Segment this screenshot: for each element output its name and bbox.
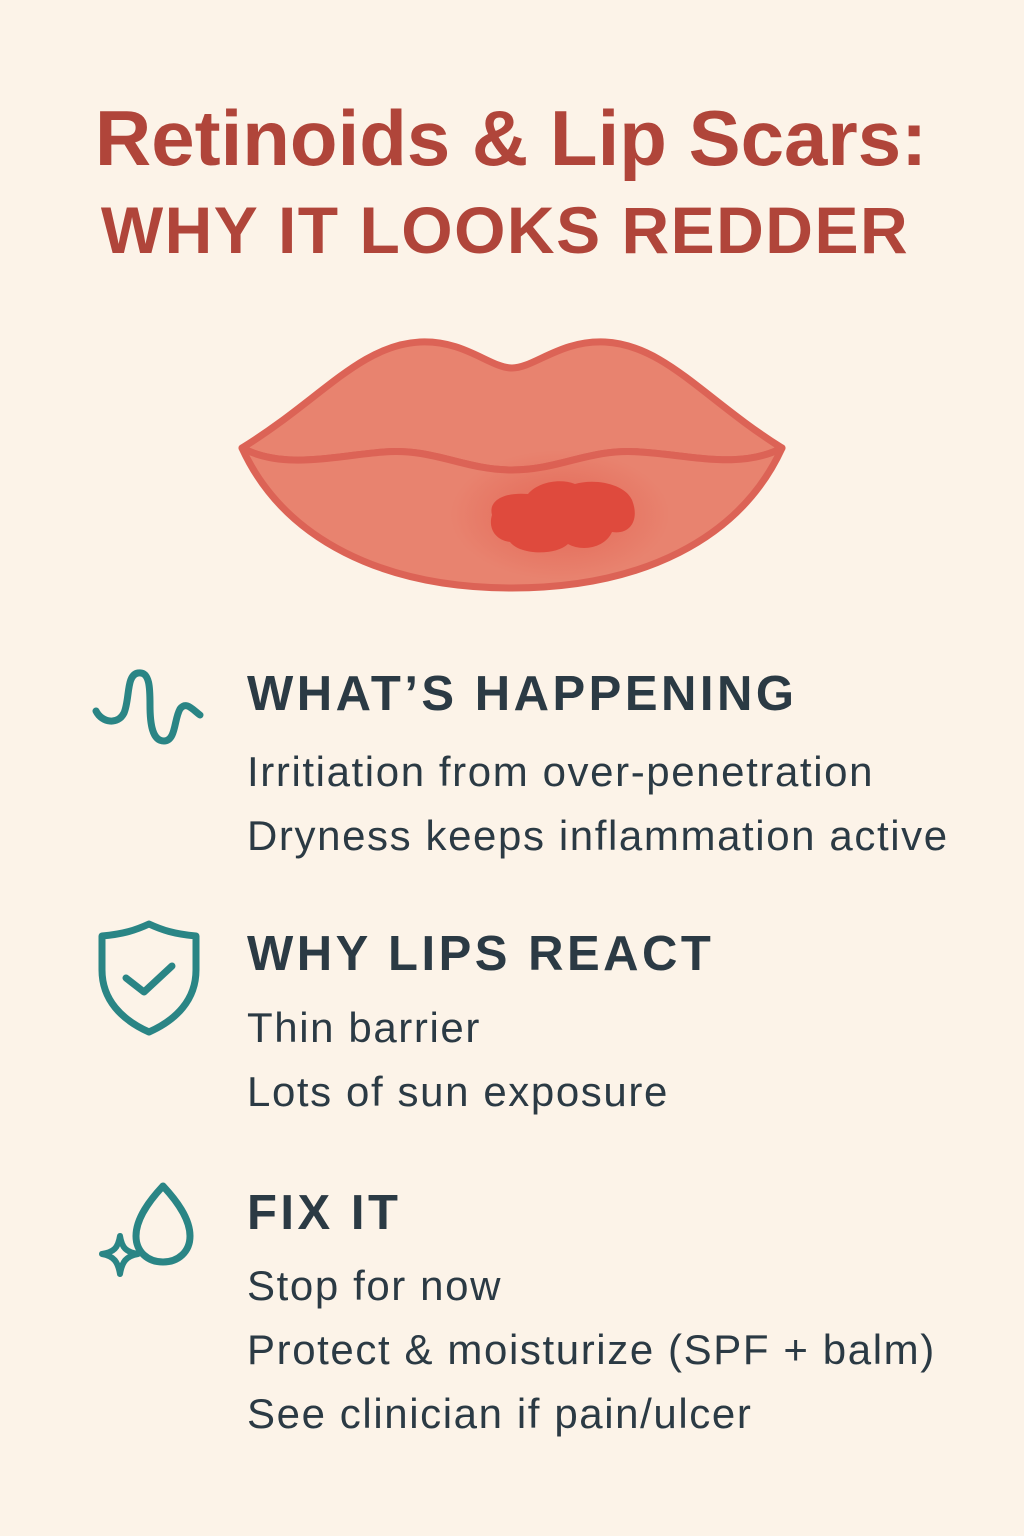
icon: shield check — [98, 920, 200, 1036]
text: fix list: Stop for now — [247, 1262, 502, 1309]
text: fix list — [247, 1262, 936, 1437]
text: lips list: Lots of sun exposure — [247, 1068, 669, 1115]
heading: what's happening: WHAT’S HAPPENING — [247, 667, 798, 721]
text: happening list: Dryness keeps inflammation active — [247, 812, 949, 859]
title: Retinoids & Lip Scars: — [95, 94, 927, 182]
title: WHY IT LOOKS REDDER — [101, 193, 909, 267]
illustration: lips with red scar — [238, 338, 786, 592]
text: fix list: See clinician if pain/ulcer — [247, 1390, 752, 1437]
text: lips list — [247, 1004, 669, 1115]
icon: wave — [92, 669, 204, 744]
icon: drop and sparkle — [99, 1182, 194, 1277]
text: happening list: Irritiation from over-penetration — [247, 748, 874, 795]
heading: fix it: FIX IT — [247, 1186, 401, 1240]
text: happening list — [247, 748, 949, 859]
text: fix list: Protect & moisturize (SPF + balm) — [247, 1326, 936, 1373]
heading: why lips react: WHY LIPS REACT — [247, 927, 714, 981]
text: lips list: Thin barrier — [247, 1004, 481, 1051]
title — [95, 94, 927, 267]
